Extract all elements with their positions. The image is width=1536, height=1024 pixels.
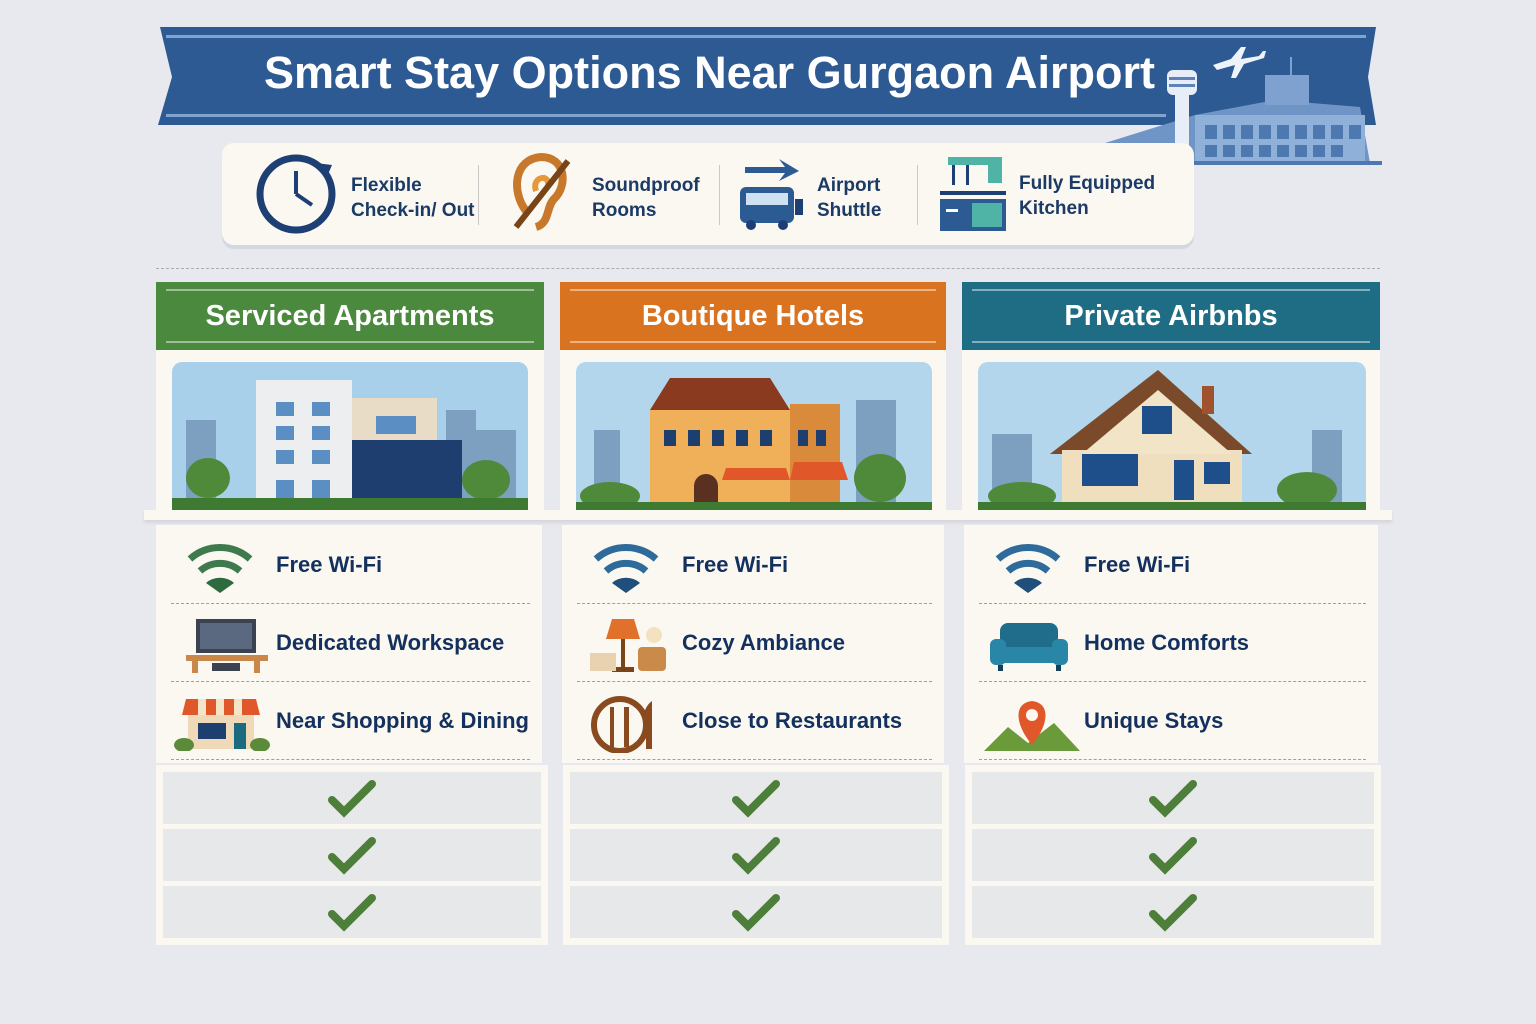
item: free wifi xyxy=(188,544,382,593)
item: home comforts: Home Comforts xyxy=(1084,630,1249,655)
icon: kitchen xyxy=(940,157,1006,231)
text: flexible check-in xyxy=(351,175,475,221)
heading: boutique hotels xyxy=(560,282,946,350)
text: fully equipped kitchen xyxy=(1019,173,1155,219)
heading: private airbnbs xyxy=(962,282,1380,350)
title banner xyxy=(158,27,1376,125)
item: cozy ambiance xyxy=(590,619,845,672)
text: soundproof rooms: Soundproof xyxy=(592,175,700,196)
text: soundproof rooms xyxy=(592,175,700,221)
checkmarks: boutique hotels xyxy=(563,765,949,945)
heading: serviced apartments: Serviced Apartments xyxy=(205,300,495,332)
feature list: private airbnbs xyxy=(964,525,1378,763)
text: flexible check-in: Flexible xyxy=(351,175,422,196)
text: soundproof rooms: Rooms xyxy=(592,200,656,221)
panel: private airbnbs xyxy=(962,282,1381,945)
icon: shuttle xyxy=(740,159,803,230)
item: home comforts xyxy=(990,623,1249,671)
text: airport shuttle xyxy=(817,175,881,221)
item: free wifi: Free Wi-Fi xyxy=(1084,552,1190,577)
text: airport shuttle: Shuttle xyxy=(817,200,881,221)
item: dedicated workspace xyxy=(186,619,504,673)
title banner: Smart Stay Options Near Gurgaon Airport xyxy=(264,47,1155,98)
icon: airport terminal xyxy=(1105,47,1382,165)
scene: private house xyxy=(962,350,1380,512)
feature bar xyxy=(222,143,1194,245)
checkmarks: private airbnbs xyxy=(965,765,1381,945)
item: free wifi: Free Wi-Fi xyxy=(682,552,788,577)
item: free wifi: Free Wi-Fi xyxy=(276,552,382,577)
heading: serviced apartments xyxy=(156,282,544,350)
heading: boutique hotels: Boutique Hotels xyxy=(642,300,864,332)
item: unique stays xyxy=(984,701,1223,751)
feature list: serviced apartments xyxy=(156,525,542,763)
item: cozy ambiance: Cozy Ambiance xyxy=(682,630,845,655)
feature list: boutique hotels xyxy=(562,525,944,763)
panel: serviced apartments xyxy=(156,282,548,945)
scene: apartment building xyxy=(156,350,544,512)
text: airport shuttle: Airport xyxy=(817,175,880,196)
checkmarks: serviced apartments xyxy=(156,765,548,945)
item: near shopping xyxy=(174,699,529,751)
item: free wifi xyxy=(996,544,1190,593)
item: close to restaurants: Close to Restaurants xyxy=(682,708,902,733)
icon: clock xyxy=(256,154,336,234)
heading: private airbnbs: Private Airbnbs xyxy=(1064,300,1278,332)
text: fully equipped kitchen: Fully Equipped xyxy=(1019,173,1155,194)
item: dedicated workspace: Dedicated Workspace xyxy=(276,630,504,655)
item: unique stays: Unique Stays xyxy=(1084,708,1223,733)
item: near shopping: Near Shopping & Dining xyxy=(276,708,529,733)
panel: boutique hotels xyxy=(560,282,949,945)
item: close to restaurants xyxy=(591,696,902,753)
text: flexible check-in: Check-in/ Out xyxy=(351,200,475,221)
scene: boutique hotel xyxy=(560,350,946,512)
text: fully equipped kitchen: Kitchen xyxy=(1019,198,1089,219)
icon: soundproof xyxy=(513,153,570,231)
item: free wifi xyxy=(594,544,788,593)
